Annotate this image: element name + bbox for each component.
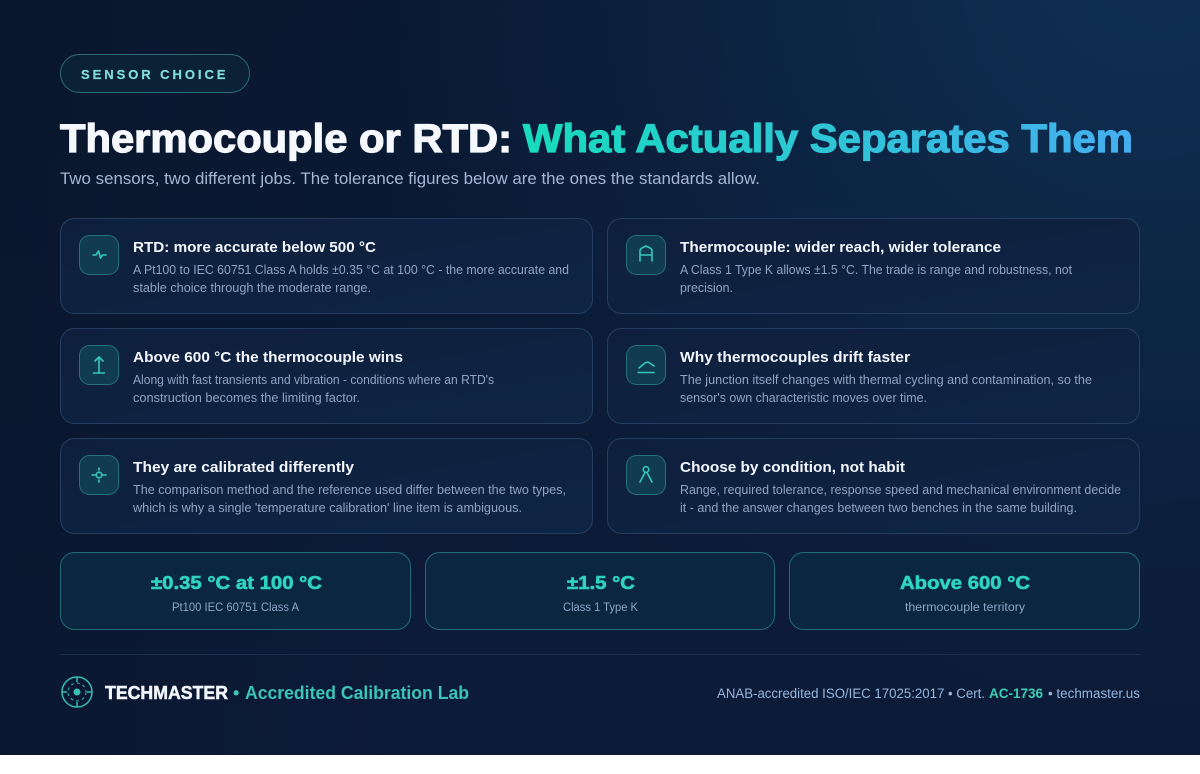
- card text: [680, 459, 1121, 515]
- stat: Pt100 tolerance: [60, 552, 410, 630]
- card text: Choose by condition, not habit: [680, 459, 905, 476]
- badge: sensor choice: SENSOR CHOICE: [81, 67, 228, 82]
- card text: They are calibrated differently: [133, 459, 355, 476]
- subtitle: Two sensors, two different jobs. The tolerance figures below are the ones the standards allow.: [60, 169, 760, 188]
- panel: thermocouple reach: [608, 218, 1140, 314]
- footer brand: TECHMASTER: [105, 683, 228, 703]
- footer brand: •: [233, 683, 239, 703]
- icon: junction arch: [626, 236, 666, 274]
- panel: choose by condition: [608, 438, 1140, 534]
- card text: [133, 239, 569, 295]
- card text: which is why a single 'temperature calibration' line item is ambiguous.: [132, 501, 522, 515]
- panel: drift: [608, 328, 1140, 424]
- card text: it - and the answer changes between two benches in the same building.: [680, 501, 1077, 515]
- card text: sensor's own characteristic moves over time.: [680, 391, 927, 405]
- footer logo icon: [62, 677, 92, 707]
- icon: up arrow: [80, 346, 118, 384]
- footer accreditation: AC-1736: [989, 686, 1043, 701]
- card text: The comparison method and the reference used differ between the two types,: [133, 483, 566, 497]
- title: [60, 117, 1133, 161]
- card text: Why thermocouples drift faster: [680, 349, 910, 366]
- footer accreditation: [717, 686, 1140, 701]
- card text: Thermocouple: wider reach, wider tolerance: [680, 239, 1001, 256]
- stat: thermocouple territory: [790, 552, 1140, 630]
- card text: construction becomes the limiting factor.: [133, 391, 360, 405]
- footer accreditation: • techmaster.us: [1048, 686, 1140, 701]
- panel: above 600: [60, 328, 592, 424]
- stat: Pt100 tolerance: ±0.35 °C at 100 °C: [151, 572, 322, 593]
- card text: [680, 239, 1073, 295]
- card text: A Pt100 to IEC 60751 Class A holds ±0.35 °C at 100 °C - the more accurate and: [133, 263, 569, 277]
- badge: sensor choice: [60, 54, 250, 92]
- footer accreditation: ANAB-accredited ISO/IEC 17025:2017 • Cert.: [717, 686, 985, 701]
- title: What Actually Separates Them: [523, 117, 1133, 161]
- stat: Type K tolerance: [426, 552, 774, 630]
- card text: Range, required tolerance, response speed and mechanical environment decide: [680, 483, 1121, 497]
- card text: RTD: more accurate below 500 °C: [133, 239, 376, 256]
- footer brand: Accredited Calibration Lab: [245, 683, 469, 703]
- card text: [133, 349, 494, 405]
- icon: pulse: [80, 236, 118, 274]
- card text: A Class 1 Type K allows ±1.5 °C. The trade is range and robustness, not: [680, 263, 1073, 277]
- stat: thermocouple territory: Above 600 °C: [900, 572, 1030, 593]
- stat: Type K tolerance: ±1.5 °C: [567, 572, 635, 593]
- title: Thermocouple or RTD:: [60, 117, 512, 161]
- stat: thermocouple territory: thermocouple territory: [905, 602, 1025, 614]
- stat: Type K tolerance: Class 1 Type K: [563, 602, 638, 614]
- card text: [132, 459, 566, 515]
- icon: drift curve: [626, 346, 666, 384]
- panel: RTD accuracy: [60, 218, 592, 314]
- panel: calibrated differently: [60, 438, 592, 534]
- card text: The junction itself changes with thermal cycling and contamination, so the: [680, 373, 1092, 387]
- stat: Pt100 tolerance: Pt100 IEC 60751 Class A: [172, 602, 299, 614]
- icon: compass: [626, 456, 666, 494]
- card text: [680, 349, 1092, 405]
- card text: Above 600 °C the thermocouple wins: [133, 349, 403, 366]
- footer brand: [105, 683, 469, 703]
- card text: Along with fast transients and vibration - conditions where an RTD's: [133, 373, 494, 387]
- icon: crosshair: [80, 456, 118, 494]
- card text: stable choice through the moderate range.: [133, 281, 371, 295]
- card text: precision.: [680, 281, 733, 295]
